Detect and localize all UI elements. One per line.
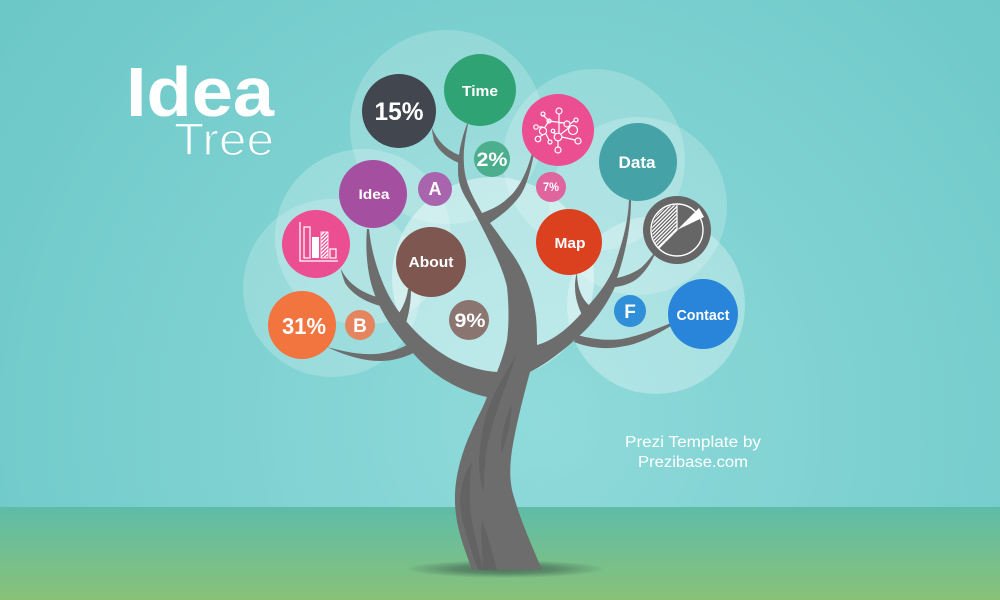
branch to About bubble	[397, 289, 411, 326]
bubble: 2%	[474, 141, 510, 177]
branch to chart bubble	[341, 269, 381, 306]
bubble: Time	[444, 54, 516, 126]
bubble: 9%	[449, 300, 489, 340]
title	[126, 53, 275, 165]
tree	[327, 124, 671, 570]
bubble: network icon	[522, 94, 594, 166]
bubble: F	[614, 295, 646, 327]
bubble: 31%	[268, 291, 336, 359]
ground	[0, 507, 1000, 600]
tree ground shadow	[405, 560, 605, 578]
bubble: pie chart icon	[643, 196, 711, 264]
bubble: Data: Data	[618, 153, 656, 172]
title: Idea	[126, 53, 275, 131]
bubble: A	[418, 172, 452, 206]
bubble: 7%	[536, 172, 566, 202]
credit text: Prezi Template by	[625, 434, 761, 451]
bubble: bar chart icon	[282, 210, 350, 278]
trunk shading	[460, 353, 517, 570]
bubble: 15%	[362, 74, 436, 148]
bubble: F: F	[624, 302, 636, 323]
bubble: Idea	[339, 160, 407, 228]
bubble: Contact: Contact	[676, 308, 730, 324]
title: Tree	[174, 114, 274, 165]
bubble: A: A	[428, 179, 442, 199]
bubble: About	[396, 227, 466, 297]
bubble: About: About	[408, 254, 454, 271]
bubble: Data	[599, 123, 677, 201]
icon: network	[534, 108, 581, 153]
branch to 31% bubble	[327, 344, 416, 361]
bubble: Map	[536, 209, 602, 275]
bubble: 2%: 2%	[476, 150, 508, 171]
bubble: 31%: 31%	[282, 313, 326, 339]
branch to Map bubble	[575, 272, 590, 315]
bubble: B	[345, 310, 375, 340]
bubble: B: B	[353, 316, 367, 337]
bubble: 7%: 7%	[543, 182, 559, 194]
bubble: 15%: 15%	[374, 98, 424, 126]
trunk and main stem	[366, 124, 655, 570]
icon: pie chart	[651, 204, 704, 256]
icon: bar chart	[300, 222, 338, 261]
credit text: Prezibase.com	[638, 454, 748, 471]
credit text	[625, 434, 761, 471]
bubble: Map: Map	[554, 235, 586, 252]
bubble: Time: Time	[462, 83, 498, 100]
branch to 15% bubble	[432, 128, 459, 163]
bubble: Contact	[668, 279, 738, 349]
bubble: 9%: 9%	[454, 311, 486, 332]
canopy: translucent circles	[243, 30, 745, 394]
bubble: Idea: Idea	[358, 186, 390, 202]
branch to Contact bubble	[574, 323, 671, 348]
